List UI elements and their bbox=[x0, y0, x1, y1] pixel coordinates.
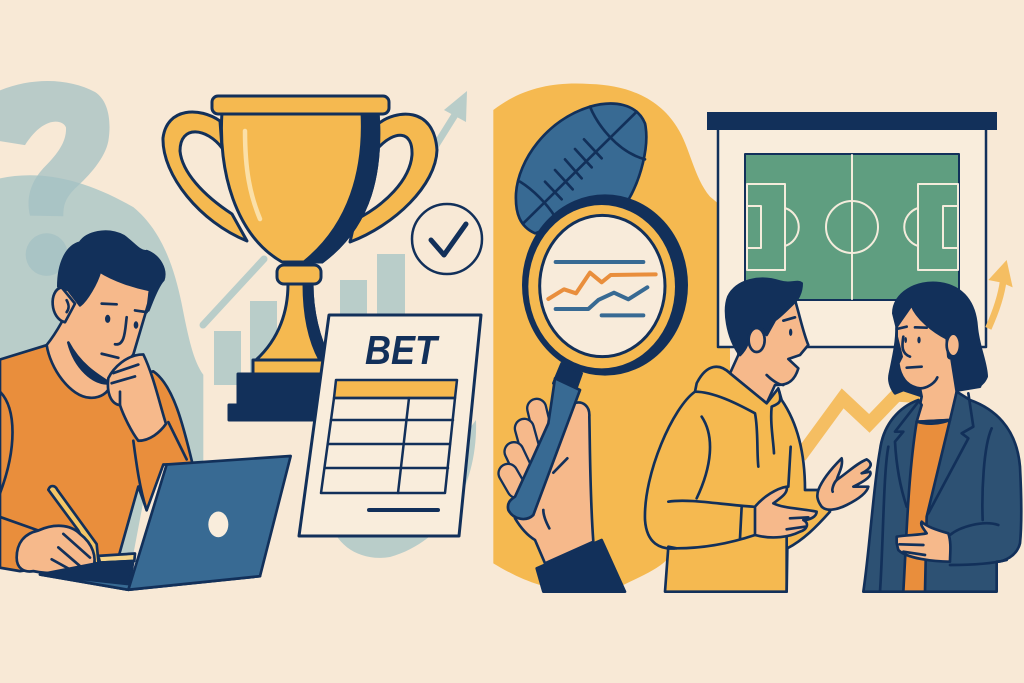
hoodie bbox=[645, 367, 830, 592]
lens chart lines bbox=[548, 262, 656, 315]
presentation board bbox=[707, 112, 997, 347]
soccer pitch bbox=[745, 154, 959, 300]
writing hand bbox=[17, 526, 95, 573]
pencil bbox=[48, 486, 99, 571]
man hair bbox=[726, 279, 802, 355]
hand holding magnifier with football bbox=[508, 104, 687, 592]
bet table bbox=[321, 380, 457, 493]
board top bar bbox=[707, 112, 997, 130]
trophy bbox=[163, 96, 437, 420]
magnifier lens bbox=[523, 196, 687, 374]
icon: football bbox=[516, 104, 646, 233]
man in yellow hoodie bbox=[645, 279, 871, 592]
person at laptop bbox=[0, 232, 193, 573]
laptop bbox=[40, 456, 291, 590]
woman face bbox=[897, 305, 957, 422]
head and neck bbox=[47, 270, 150, 398]
growth arrow chart bbox=[203, 91, 467, 385]
magnifier handle bbox=[553, 363, 582, 397]
growth zigzag arrow bbox=[800, 260, 1013, 457]
trophy stem bbox=[256, 284, 330, 360]
bet slip bbox=[299, 315, 481, 536]
man hands bbox=[755, 487, 817, 537]
bet heading: BET bbox=[365, 327, 440, 373]
blazer bbox=[863, 392, 1021, 592]
left background blob and question mark bbox=[0, 81, 203, 554]
woman hair bbox=[889, 283, 987, 397]
hand on chin bbox=[108, 354, 166, 441]
man face details bbox=[749, 328, 765, 352]
sleeve bbox=[537, 540, 625, 592]
hair bbox=[58, 232, 164, 310]
woman hand bbox=[897, 522, 950, 562]
man head bbox=[730, 300, 808, 403]
trophy handles bbox=[163, 112, 437, 242]
icon: check circle bbox=[412, 204, 482, 274]
lower teal blob bbox=[330, 420, 476, 558]
ear bbox=[53, 287, 75, 322]
orange top bbox=[903, 420, 950, 592]
face details bbox=[67, 300, 147, 358]
sweater bbox=[0, 345, 193, 571]
trophy cup bbox=[221, 112, 379, 262]
right gold blob bbox=[493, 83, 730, 585]
fingers bbox=[508, 408, 543, 488]
woman in blazer bbox=[863, 283, 1021, 592]
hand palm bbox=[515, 402, 593, 563]
